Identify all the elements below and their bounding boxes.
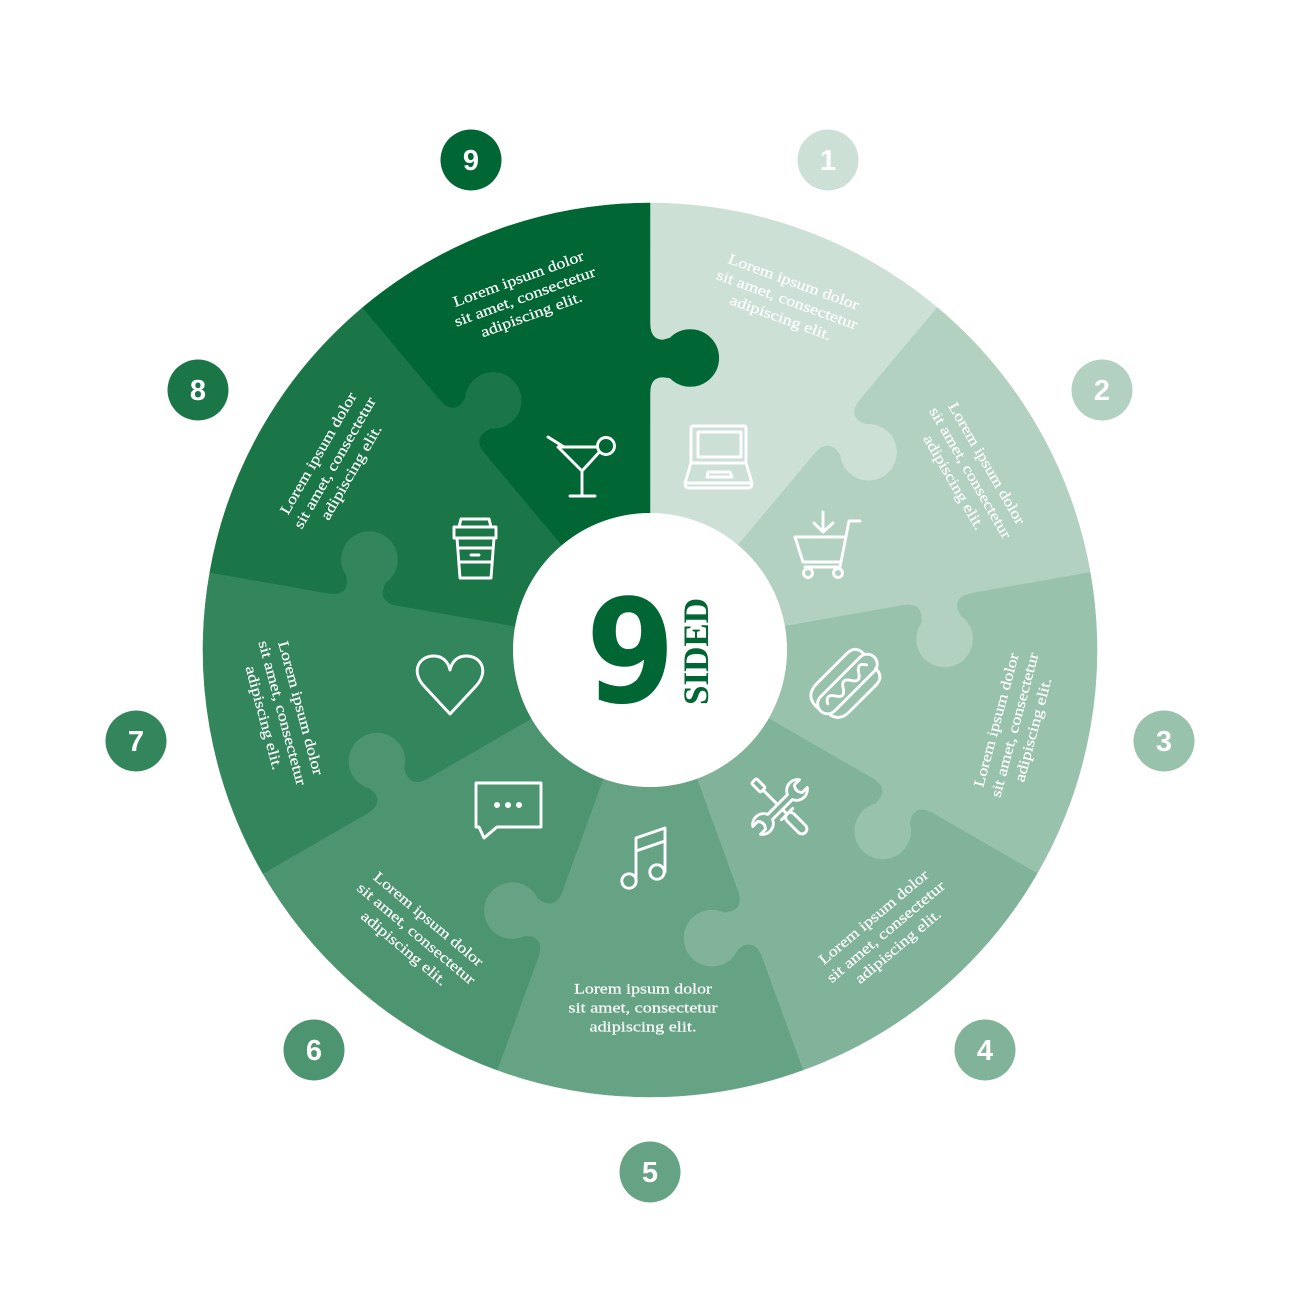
number badges bbox=[106, 130, 1194, 1202]
puzzle piece 2 bbox=[717, 308, 1157, 754]
text block 3 bbox=[970, 646, 1061, 804]
text block 3: Lorem ipsum dolor bbox=[972, 651, 1023, 789]
text block 9 bbox=[446, 247, 604, 348]
text block 7 bbox=[236, 634, 327, 792]
text block 5: sit amet, consectetur bbox=[568, 1000, 718, 1016]
text block 5 bbox=[568, 982, 718, 1036]
icon: shopping cart bbox=[795, 512, 860, 578]
badge 2: 2 bbox=[1094, 375, 1110, 407]
panel: segment 6 bbox=[227, 650, 614, 1070]
badge 8: 8 bbox=[190, 375, 206, 407]
text block 7: Lorem ipsum dolor bbox=[274, 639, 325, 777]
text block 4 bbox=[812, 864, 961, 1001]
puzzle pie wheel bbox=[119, 123, 1157, 1168]
badge 9: 9 bbox=[463, 145, 479, 177]
panel: segment 9 bbox=[363, 123, 803, 570]
panel: segment 4 bbox=[597, 702, 1037, 1122]
badge 4: 4 bbox=[977, 1035, 993, 1067]
badge 4 bbox=[954, 1020, 1016, 1080]
big number 9: 9 bbox=[586, 568, 675, 736]
text block 9: sit amet, consectetur bbox=[452, 264, 598, 330]
text block 2: adipiscing elit. bbox=[919, 432, 987, 533]
badge 5 bbox=[620, 1142, 680, 1202]
text block 6 bbox=[341, 866, 490, 1003]
text block 5: Lorem ipsum dolor bbox=[574, 982, 712, 998]
puzzle piece 7 bbox=[119, 454, 559, 874]
text block 4: sit amet, consectetur bbox=[824, 878, 949, 986]
icon: music notes bbox=[622, 828, 665, 888]
panel: segment 2 bbox=[717, 308, 1157, 754]
puzzle piece 3 bbox=[753, 572, 1140, 915]
badge 8 bbox=[168, 360, 228, 420]
text block 6: Lorem ipsum dolor bbox=[370, 869, 486, 970]
panel: segment 8 bbox=[210, 289, 597, 632]
text block 2: Lorem ipsum dolor bbox=[945, 400, 1027, 528]
text block 2: sit amet, consectetur bbox=[925, 405, 1014, 542]
badge 3 bbox=[1134, 710, 1194, 772]
text block 1: adipiscing elit. bbox=[727, 293, 833, 344]
text block 9: adipiscing elit. bbox=[479, 290, 585, 341]
text block 8: Lorem ipsum dolor bbox=[278, 390, 360, 518]
text block 3: sit amet, consectetur bbox=[988, 651, 1042, 799]
icon: wrench and screwdriver bbox=[748, 775, 811, 838]
text block 8: sit amet, consectetur bbox=[291, 395, 380, 532]
badge 9 bbox=[440, 130, 502, 190]
panel: segment 5 bbox=[416, 749, 803, 1168]
puzzle piece 6 bbox=[227, 650, 614, 1070]
badge 2 bbox=[1072, 360, 1132, 420]
text block 1: sit amet, consectetur bbox=[714, 267, 860, 333]
text block 2 bbox=[909, 395, 1030, 551]
badge 1: 1 bbox=[820, 145, 836, 177]
text block 9: Lorem ipsum dolor bbox=[451, 248, 586, 311]
icon: coffee cup bbox=[454, 519, 496, 578]
panel: segment 3 bbox=[753, 572, 1140, 915]
badge 6: 6 bbox=[306, 1035, 322, 1067]
badge 7: 7 bbox=[128, 726, 144, 758]
puzzle piece 5 bbox=[416, 749, 803, 1168]
badge 3: 3 bbox=[1156, 726, 1172, 758]
icon: cocktail glass bbox=[548, 437, 614, 496]
text block 4: adipiscing elit. bbox=[852, 906, 945, 987]
badge 5: 5 bbox=[642, 1157, 658, 1189]
text block 3: adipiscing elit. bbox=[1012, 676, 1055, 784]
text block 1 bbox=[708, 250, 866, 351]
panel: segment 7 bbox=[119, 454, 559, 874]
puzzle piece 9 bbox=[363, 123, 803, 570]
badge 6 bbox=[284, 1020, 344, 1080]
text block 7: sit amet, consectetur bbox=[255, 639, 309, 787]
text block 4: Lorem ipsum dolor bbox=[816, 867, 932, 968]
puzzle piece 8 bbox=[210, 289, 597, 632]
text block 8 bbox=[275, 385, 396, 541]
text block 6: sit amet, consectetur bbox=[353, 880, 478, 988]
panel: segment 1 bbox=[650, 203, 937, 545]
icon: speech bubble bbox=[476, 783, 541, 838]
text block 1: Lorem ipsum dolor bbox=[726, 251, 861, 314]
text block 6: adipiscing elit. bbox=[357, 908, 450, 989]
icon: hot dog bbox=[805, 642, 889, 726]
icon: heart bbox=[417, 656, 483, 714]
puzzle piece 1 bbox=[650, 203, 937, 545]
icon: laptop bbox=[685, 426, 752, 488]
text block 5: adipiscing elit. bbox=[590, 1020, 696, 1036]
center circle bbox=[513, 513, 787, 787]
puzzle piece 4 bbox=[597, 702, 1037, 1122]
badge 1 bbox=[798, 130, 858, 190]
text block 8: adipiscing elit. bbox=[318, 422, 386, 523]
text block 7: adipiscing elit. bbox=[242, 664, 285, 772]
badge 7 bbox=[106, 710, 166, 772]
label: SIDED: SIDED bbox=[676, 598, 716, 705]
